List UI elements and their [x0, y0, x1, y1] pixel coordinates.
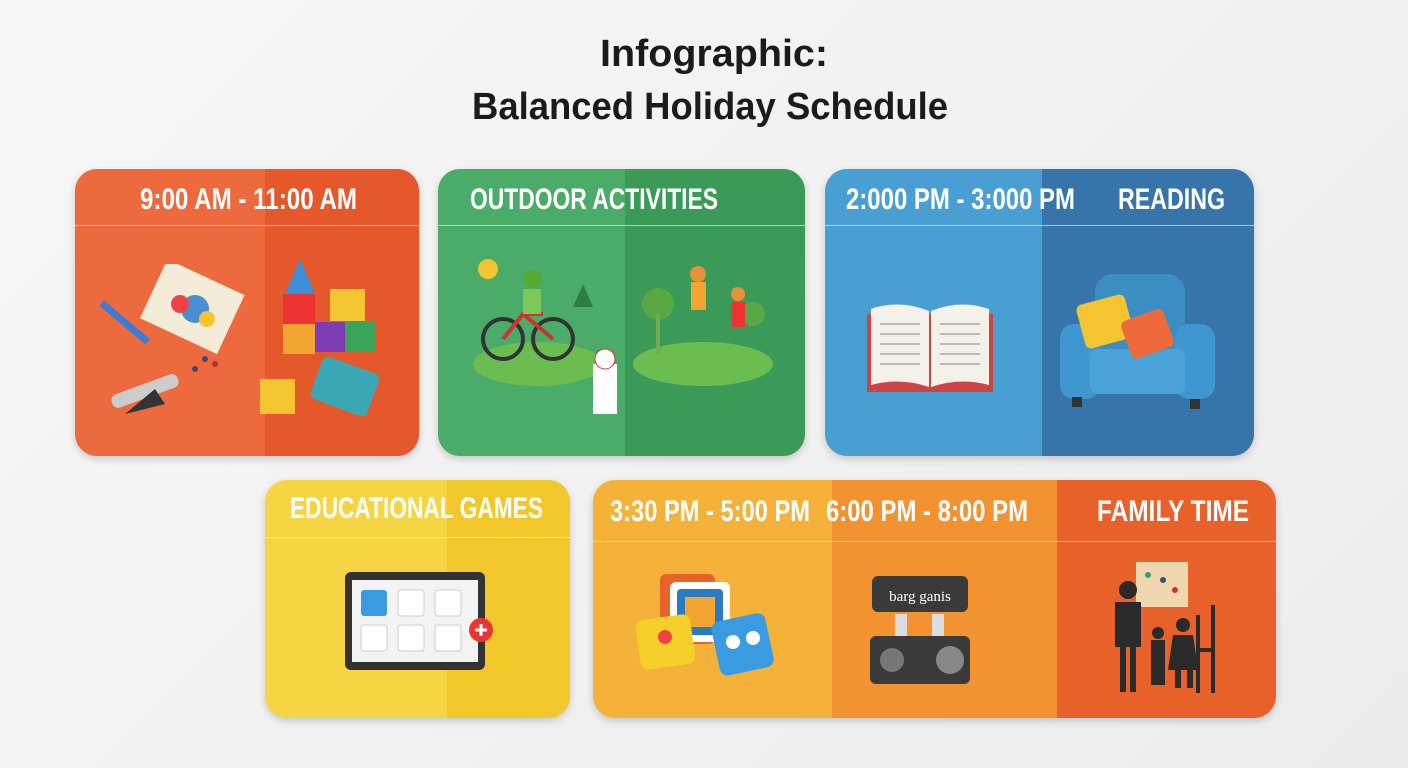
heading: time slots and family time: 6:00 PM - 8:00 PM — [826, 495, 1028, 528]
icon: open book — [867, 304, 993, 392]
panel: afternoon and family time — [593, 480, 1276, 718]
icon: game cards — [636, 574, 774, 676]
panel: 9-11 am — [75, 169, 419, 456]
icon: board games — [870, 576, 970, 684]
icon: tablet — [345, 572, 493, 670]
icon: kids in park — [633, 266, 773, 386]
heading: 2:00 PM - 3:00 PM and reading: 2:000 PM - 3:000 PM — [846, 183, 1075, 216]
icon: board games: barg ganis — [889, 589, 951, 605]
heading: 2:00 PM - 3:00 PM and reading: READING — [1118, 183, 1225, 216]
heading: time slots and family time: 3:30 PM - 5:00 PM — [610, 495, 810, 528]
title: Infographic: — [600, 33, 828, 75]
heading: time slots and family time — [610, 495, 1249, 528]
panel: educational games — [265, 480, 570, 718]
heading: outdoor activities: OUTDOOR ACTIVITIES — [470, 183, 718, 216]
panel: outdoor activities — [438, 169, 805, 456]
title — [472, 33, 948, 128]
icon: bike rider — [473, 259, 617, 414]
icon: art supplies — [100, 264, 244, 414]
panel: reading — [825, 169, 1254, 456]
title: Balanced Holiday Schedule — [472, 86, 948, 128]
icon: family silhouette — [1115, 562, 1215, 693]
heading: 9:00 AM - 11:00 AM: 9:00 AM - 11:00 AM — [140, 183, 357, 216]
icon: blocks — [260, 259, 380, 416]
icon: armchair — [1060, 274, 1215, 409]
